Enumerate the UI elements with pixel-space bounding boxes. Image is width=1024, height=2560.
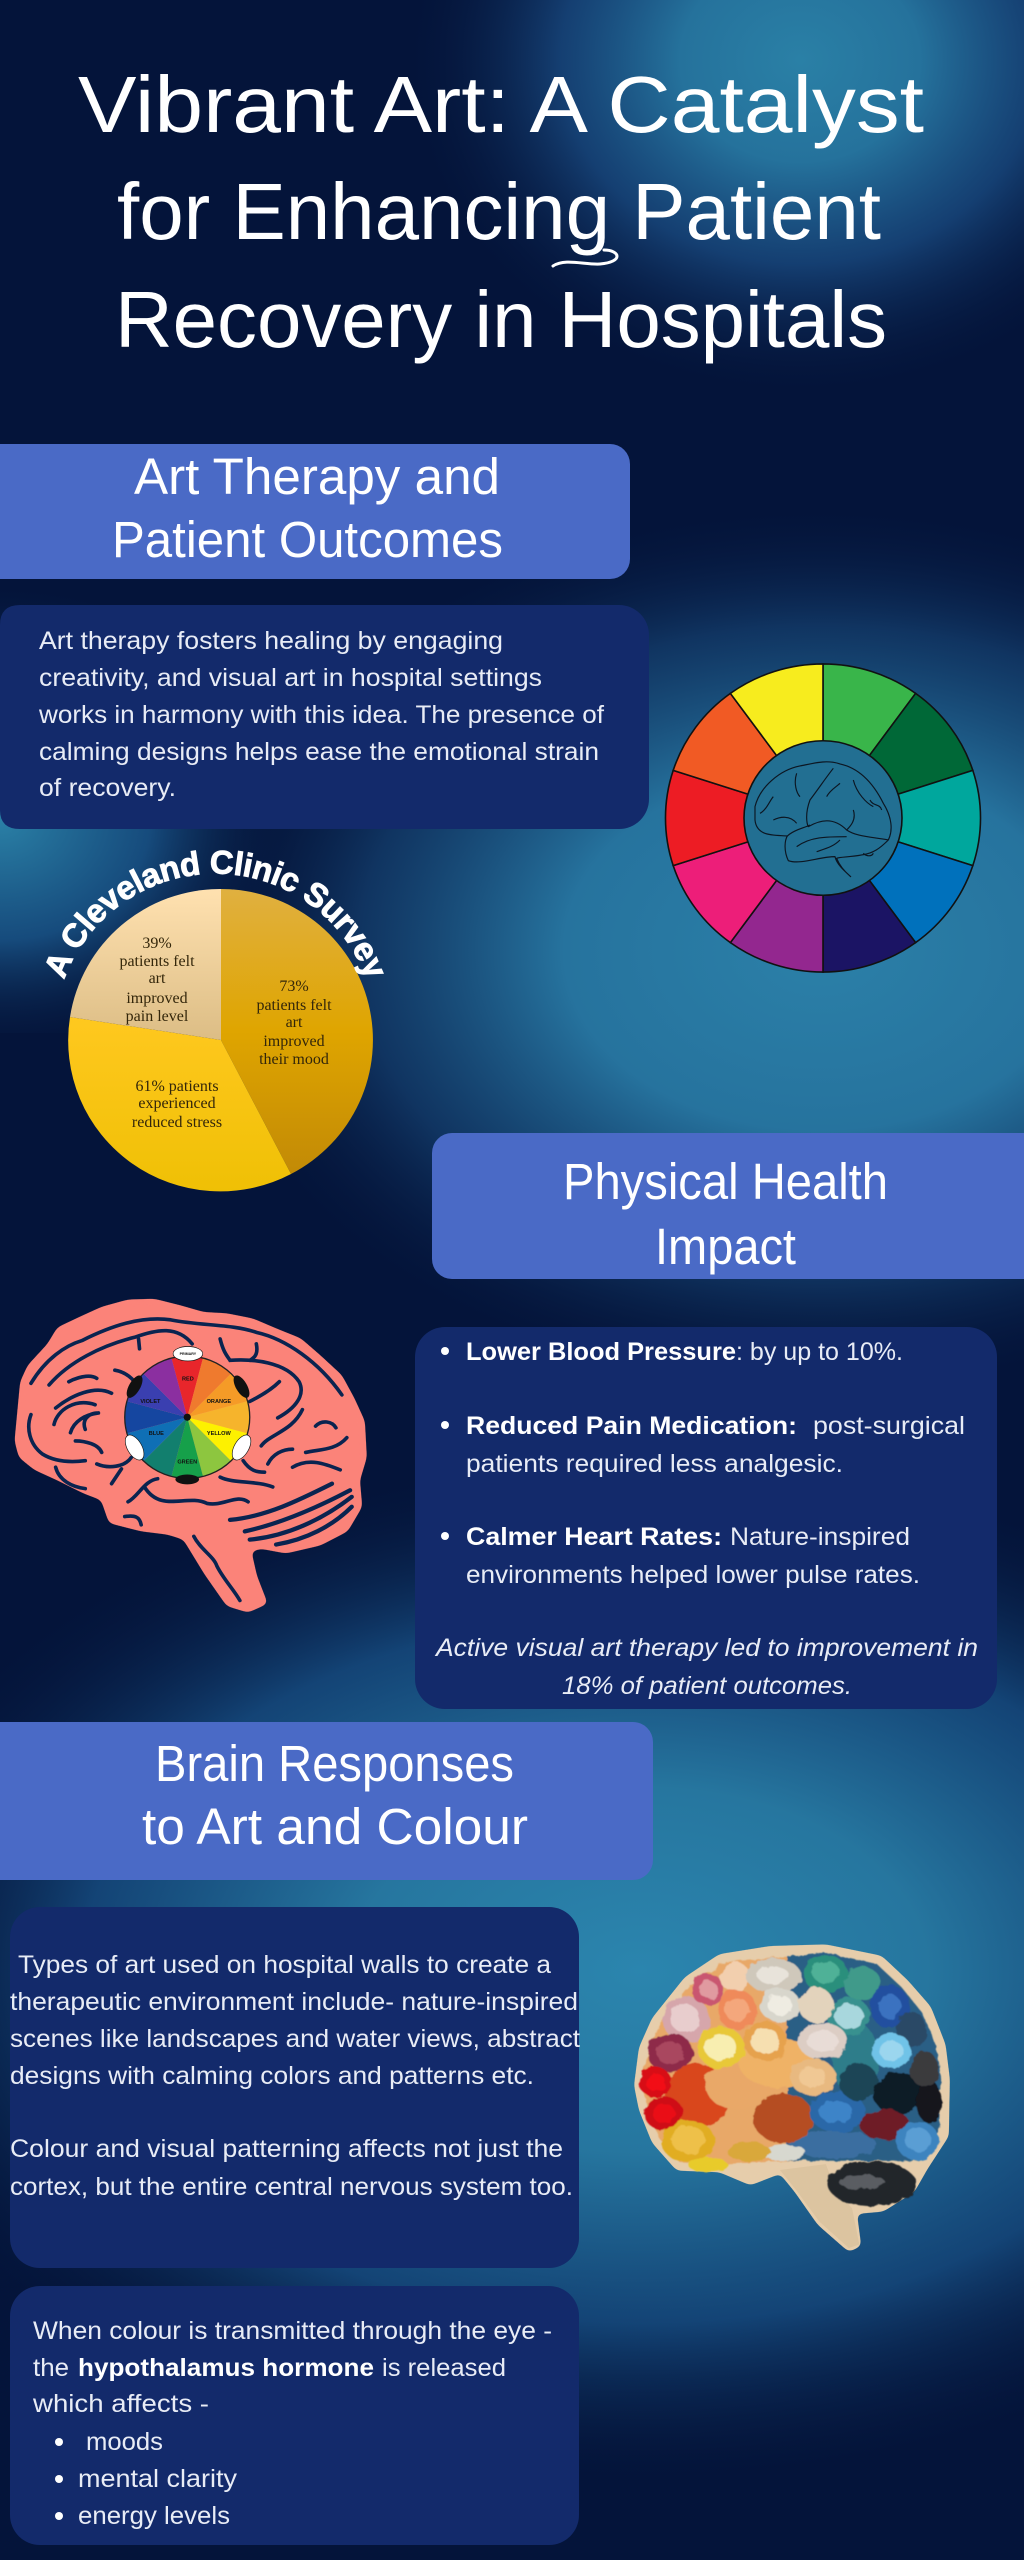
icon: paint-palette brain — [634, 1944, 950, 2252]
panel: art therapy text — [0, 605, 649, 829]
panel: hypothalamus text: mental clarity — [78, 2465, 238, 2493]
panel: physical health list — [415, 1327, 997, 1709]
colour wheel inside brain: RED — [182, 1376, 194, 1382]
colour wheel inside brain: YELLOW — [207, 1431, 231, 1437]
icon: pink brain with colour wheel — [15, 1299, 367, 1613]
panel: hypothalamus text: which affects - — [32, 2390, 209, 2418]
pie label: 73%: patients felt — [256, 997, 332, 1014]
panel: types of art text: Types of art used on hospital walls to create a — [18, 1951, 551, 1979]
bullet: lower blood pressure: Lower Blood Pressure — [466, 1338, 736, 1366]
pie label: 73%: their mood — [259, 1051, 329, 1068]
heading: Art Therapy and Patient Outcomes: Art Therapy and — [134, 448, 500, 505]
bullet: calmer heart rates — [441, 1523, 920, 1589]
colour wheel inside brain: GREEN — [177, 1459, 197, 1465]
title: for Enhancing Patient — [117, 167, 881, 256]
heading: Brain Responses to Art and Colour: Brain Responses — [155, 1735, 514, 1792]
icon: colour wheel with brain — [665, 664, 981, 972]
pie label: 39%: patients felt — [119, 953, 195, 970]
title: Vibrant Art: A Catalyst — [78, 60, 924, 149]
curved heading: A Cleveland Clinic Survey: A Cleveland Clinic Survey — [46, 850, 384, 980]
panel: types of art text — [10, 1907, 580, 2268]
panel: art therapy text: Art therapy fosters healing by engaging — [39, 627, 503, 655]
bullet: lower blood pressure — [441, 1338, 903, 1366]
panel: hypothalamus text: is released — [382, 2354, 506, 2382]
underpainting — [642, 1956, 796, 2164]
pie label: 39%: art — [149, 970, 166, 987]
panel: hypothalamus text: moods — [86, 2428, 163, 2456]
bullet: calmer heart rates: environments helped lower pulse rates. — [466, 1561, 920, 1589]
pie label: 61%: 61% patients — [135, 1078, 219, 1095]
heading: Physical Health Impact: Physical Health — [563, 1153, 888, 1210]
pie label: 73% — [256, 978, 332, 1068]
pie label: 39%: improved — [126, 990, 188, 1007]
heading: Brain Responses to Art and Colour: to Art and Colour — [142, 1798, 528, 1855]
panel: art therapy text: works in harmony with this idea. The presence of — [38, 701, 604, 729]
pie label: 73%: improved — [263, 1033, 325, 1050]
pie label: 61% — [132, 1078, 222, 1131]
heading: Physical Health Impact — [432, 1133, 1024, 1279]
bullet: reduced pain medication: patients required less analgesic. — [466, 1450, 843, 1478]
title: Recovery in Hospitals — [115, 275, 887, 364]
pie label: 39%: pain level — [126, 1008, 189, 1025]
panel: art therapy text: calming designs helps ease the emotional strain — [39, 738, 599, 766]
pie label: 73%: 73% — [279, 978, 309, 995]
colour wheel inside brain — [119, 1346, 255, 1485]
bullet: calmer heart rates: Nature-inspired — [730, 1523, 910, 1551]
pie label: 61%: experienced — [138, 1095, 216, 1112]
bullet: reduced pain medication: Reduced Pain Medication: — [466, 1412, 797, 1440]
panel: art therapy text: of recovery. — [39, 774, 176, 802]
colour wheel inside brain: PRIMARY — [180, 1352, 197, 1356]
colour wheel inside brain: ORANGE — [207, 1399, 231, 1405]
heading: Art Therapy and Patient Outcomes — [0, 444, 630, 579]
heading: Brain Responses to Art and Colour — [0, 1722, 653, 1880]
panel: hypothalamus text: energy levels — [78, 2502, 230, 2530]
heading: Physical Health Impact: Impact — [655, 1218, 796, 1275]
note: active visual art therapy: Active visual art therapy led to improvement in — [434, 1634, 978, 1662]
bullet: calmer heart rates: Calmer Heart Rates: — [466, 1523, 722, 1551]
note: active visual art therapy: 18% of patient outcomes. — [562, 1672, 852, 1700]
pie chart: Cleveland Clinic survey — [68, 889, 373, 1191]
pie label: 61%: reduced stress — [132, 1114, 222, 1131]
heading: Art Therapy and Patient Outcomes: Patient Outcomes — [112, 511, 503, 568]
pie label: 73%: art — [286, 1014, 303, 1031]
icon: brain line drawing — [755, 762, 891, 877]
panel: types of art text: designs with calming colors and patterns etc. — [10, 2062, 534, 2090]
panel: types of art text: cortex, but the entire central nervous system too. — [10, 2173, 573, 2201]
panel: hypothalamus text: the — [33, 2354, 69, 2382]
note: active visual art therapy — [434, 1634, 978, 1700]
panel: types of art text: Colour and visual patterning affects not just the — [10, 2135, 563, 2163]
bullet: reduced pain medication: post-surgical — [813, 1412, 965, 1440]
colour wheel inside brain: BLUE — [149, 1431, 164, 1437]
bullet: reduced pain medication — [441, 1412, 965, 1478]
panel: hypothalamus text: hypothalamus hormone — [78, 2354, 374, 2382]
panel: art therapy text: creativity, and visual art in hospital settings — [39, 664, 542, 692]
panel: hypothalamus text: When colour is transmitted through the eye - — [33, 2317, 552, 2345]
pie label: 39%: 39% — [142, 935, 172, 952]
colour wheel inside brain: VIOLET — [140, 1399, 161, 1405]
pie label: 39% — [119, 935, 195, 1025]
panel: hypothalamus text — [10, 2286, 579, 2545]
panel: types of art text: scenes like landscapes and water views, abstract — [10, 2025, 580, 2053]
title — [78, 60, 924, 364]
bullet: lower blood pressure: : by up to 10%. — [736, 1338, 903, 1366]
panel: types of art text: therapeutic environment include- nature-inspired — [10, 1988, 578, 2016]
